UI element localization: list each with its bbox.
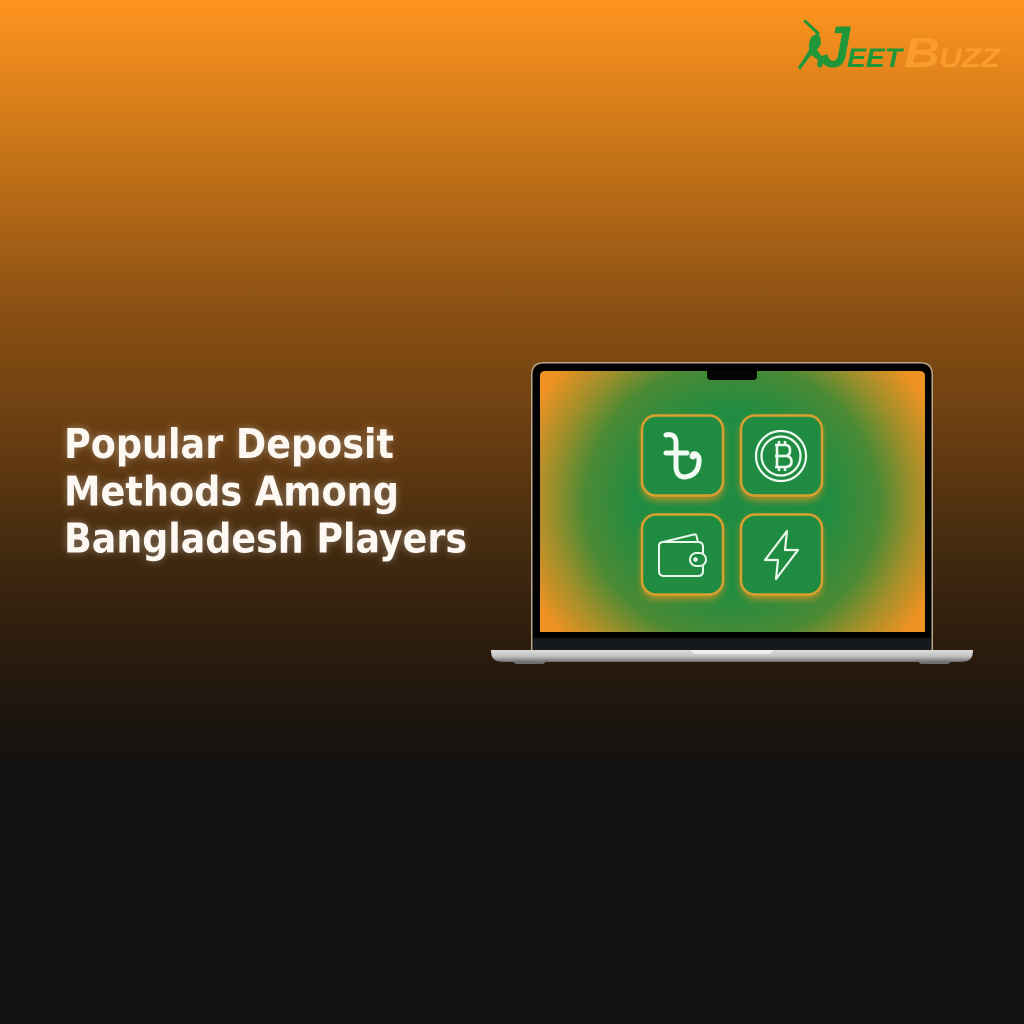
icon grid <box>642 416 822 599</box>
icon: taka symbol <box>666 435 699 477</box>
title glow: Bangladesh Players <box>64 514 467 562</box>
logo wordmark: Buzz: B <box>904 29 940 76</box>
title text: Methods Among <box>64 468 399 516</box>
tile glows <box>642 419 822 599</box>
title text: Popular Deposit <box>64 420 394 468</box>
icon: bitcoin coin <box>756 431 806 481</box>
logo wordmark: uzz: UZZ <box>939 43 1002 73</box>
tile: bitcoin <box>741 416 822 496</box>
logo icon: cricket batter <box>798 20 824 70</box>
logo: JeetBuzz <box>798 15 1002 80</box>
tile: taka <box>642 416 723 496</box>
laptop <box>491 362 973 664</box>
icon: lightning bolt <box>765 531 798 579</box>
camera notch <box>707 370 757 380</box>
tile: wallet <box>642 514 723 594</box>
logo wordmark: Jeet: J <box>820 15 852 80</box>
title glow <box>64 420 467 562</box>
title text <box>64 420 467 562</box>
tile: lightning <box>741 514 822 594</box>
icon: wallet <box>659 534 706 576</box>
logo wordmark: eet: EET <box>847 43 905 73</box>
laptop base <box>491 650 973 662</box>
lower bezel <box>533 638 931 650</box>
laptop lid <box>531 362 933 650</box>
laptop screen <box>540 371 925 632</box>
title <box>64 420 467 562</box>
title text: Bangladesh Players <box>64 514 467 562</box>
laptop bezel <box>532 364 932 650</box>
laptop feet <box>513 662 951 664</box>
title glow: Popular Deposit <box>64 420 394 468</box>
laptop thumb recess <box>691 650 773 654</box>
title glow: Methods Among <box>64 468 399 516</box>
